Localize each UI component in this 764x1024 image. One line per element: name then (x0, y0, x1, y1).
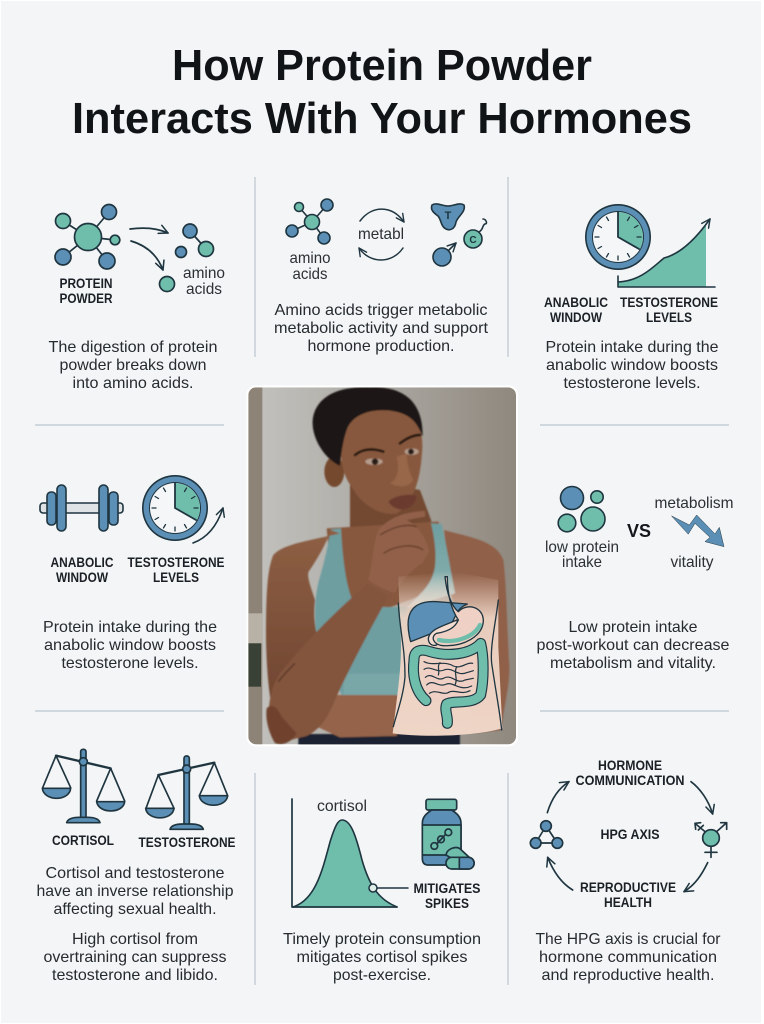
text: hpg description: hormone communication (539, 949, 717, 966)
text: high cortisol: High cortisol from (72, 931, 198, 948)
text: metabolic description: Amino acids trigger metabolic (274, 302, 488, 319)
label: amino acids: amino (290, 250, 331, 267)
icon: supplement bottle with pills (422, 799, 474, 869)
text: high cortisol (44, 931, 226, 984)
icon: dumbbell (40, 485, 123, 531)
text: anabolic description: Protein intake during the (43, 619, 217, 636)
label: hormone communication: COMMUNICATION (576, 773, 684, 788)
label: testosterone levels (128, 555, 224, 585)
text: digestion description: powder breaks down (60, 357, 206, 374)
label: low protein intake: low protein (545, 539, 619, 556)
text: metabolic description: metabolic activity and support (274, 320, 489, 337)
icon: testosterone scale (146, 756, 228, 829)
label: mitigates spikes: MITIGATES (414, 881, 480, 896)
label: protein powder (60, 276, 113, 306)
label: anabolic window: ANABOLIC (544, 295, 608, 310)
icon: cortisol scale (42, 749, 125, 823)
text: low protein description: post-workout can decrease (536, 637, 730, 654)
label: testosterone levels (620, 295, 718, 325)
label: amino acids: acids (186, 281, 222, 298)
text: hpg description (536, 931, 721, 984)
text: timely protein (283, 931, 481, 984)
panel: metabolic activity (274, 199, 489, 355)
icon: clock (585, 204, 651, 270)
chart: cortisol bell curve (292, 799, 408, 907)
label: vitality: vitality (670, 554, 714, 571)
digestive system overlay (393, 572, 502, 736)
label: testosterone levels: LEVELS (646, 310, 692, 325)
label: protein powder: PROTEIN (60, 276, 112, 291)
text: high cortisol: testosterone and libido. (52, 967, 218, 984)
icon: clock with arrow (142, 475, 223, 543)
small intestine (422, 657, 475, 701)
label: low protein intake (545, 539, 619, 571)
label: testosterone levels: LEVELS (153, 570, 199, 585)
icon: hormone symbols (431, 204, 486, 266)
panel: cortisol and testosterone (36, 749, 236, 984)
text: inverse relationship: affecting sexual health. (54, 901, 216, 918)
text: hpg description: The HPG axis is crucial for (536, 931, 721, 948)
panel: HPG axis (530, 758, 727, 984)
label: cortisol: cortisol (317, 798, 367, 815)
text: inverse relationship (36, 865, 234, 918)
text: digestion description: The digestion of protein (48, 339, 218, 356)
label: vs: VS (627, 521, 651, 541)
text: anabolic description: anabolic window boosts (546, 357, 718, 374)
label: testosterone levels: TESTOSTERONE (128, 555, 224, 570)
label: amino acids: amino (183, 265, 225, 282)
label: hormone communication: HORMONE (598, 758, 662, 773)
panel: low protein intake (536, 486, 734, 672)
label: hpg axis: HPG AXIS (600, 827, 660, 842)
text: anabolic description: anabolic window boosts (44, 637, 216, 654)
label: metabolism: metabolism (654, 495, 734, 512)
large intestine (413, 643, 483, 723)
icon: hormone symbols: T (445, 210, 452, 222)
text: metabolic description: hormone production. (308, 338, 454, 355)
icon: cycle arrows and symbols (530, 782, 727, 892)
photo backdrop (248, 387, 516, 744)
text: timely protein: Timely protein consumption (283, 931, 481, 948)
label: anabolic window: ANABOLIC (50, 555, 114, 570)
text: inverse relationship: have an inverse relationship (36, 883, 234, 900)
text: anabolic description (546, 339, 719, 392)
title: Interacts With Your Hormones (72, 94, 692, 143)
label: cortisol: CORTISOL (52, 833, 114, 848)
panel: anabolic window left (40, 475, 224, 672)
label: low protein intake: intake (562, 554, 602, 571)
label: reproductive health (580, 880, 676, 910)
label: reproductive health: REPRODUCTIVE (580, 880, 676, 895)
label: mitigates spikes (414, 881, 480, 911)
text: timely protein: mitigates cortisol spikes (296, 949, 468, 966)
label: mitigates spikes: SPIKES (425, 896, 469, 911)
label: testosterone: TESTOSTERONE (138, 835, 236, 850)
label: anabolic window: WINDOW (550, 310, 602, 325)
panel: cortisol spike (283, 798, 481, 984)
panel: central photo of woman with digestive overlay (246, 385, 518, 747)
text: metabolic description (274, 302, 489, 355)
title (72, 41, 692, 143)
text: timely protein: post-exercise. (333, 967, 431, 984)
icon: falling zigzag arrow (672, 515, 724, 547)
text: digestion description (48, 339, 218, 392)
label: hormone communication (576, 758, 684, 788)
label: amino acids: acids (292, 266, 328, 283)
panel: anabolic window top right (544, 204, 719, 392)
text: anabolic description: Protein intake during the (546, 339, 719, 356)
label: anabolic window (544, 295, 608, 325)
label: testosterone levels: TESTOSTERONE (620, 295, 718, 310)
liver (408, 602, 467, 642)
label: reproductive health: HEALTH (604, 895, 652, 910)
stomach (433, 577, 483, 646)
text: anabolic description (43, 619, 217, 672)
label: anabolic window: WINDOW (56, 570, 108, 585)
woman figure (266, 387, 509, 747)
text: anabolic description: testosterone levels. (62, 655, 198, 672)
label: anabolic window (50, 555, 114, 585)
icon: metabolic cycle arrows (359, 209, 404, 260)
text: low protein description: Low protein intake (568, 619, 698, 636)
icon: amino acid molecule (286, 199, 333, 244)
duodenum (428, 620, 460, 645)
text: digestion description: into amino acids. (72, 375, 194, 392)
label: metabl: metabl (358, 226, 404, 243)
text: anabolic description: testosterone levels. (564, 375, 700, 392)
label: protein powder: POWDER (60, 291, 113, 306)
label: amino acids (183, 265, 225, 298)
text: inverse relationship: Cortisol and testosterone (46, 865, 225, 882)
icon: protein molecule breaking into amino acids (55, 204, 214, 292)
title: How Protein Powder (172, 41, 592, 90)
text: low protein description: metabolism and vitality. (550, 655, 716, 672)
chart: rising testosterone area (618, 219, 715, 287)
icon: hormone symbols: C (469, 235, 477, 246)
panel: protein digestion (48, 204, 225, 392)
label: amino acids (290, 250, 331, 283)
text: hpg description: and reproductive health. (542, 967, 714, 984)
text: low protein description (536, 619, 730, 672)
text: high cortisol: overtraining can suppress (44, 949, 226, 966)
icon: low protein circles (558, 486, 605, 532)
